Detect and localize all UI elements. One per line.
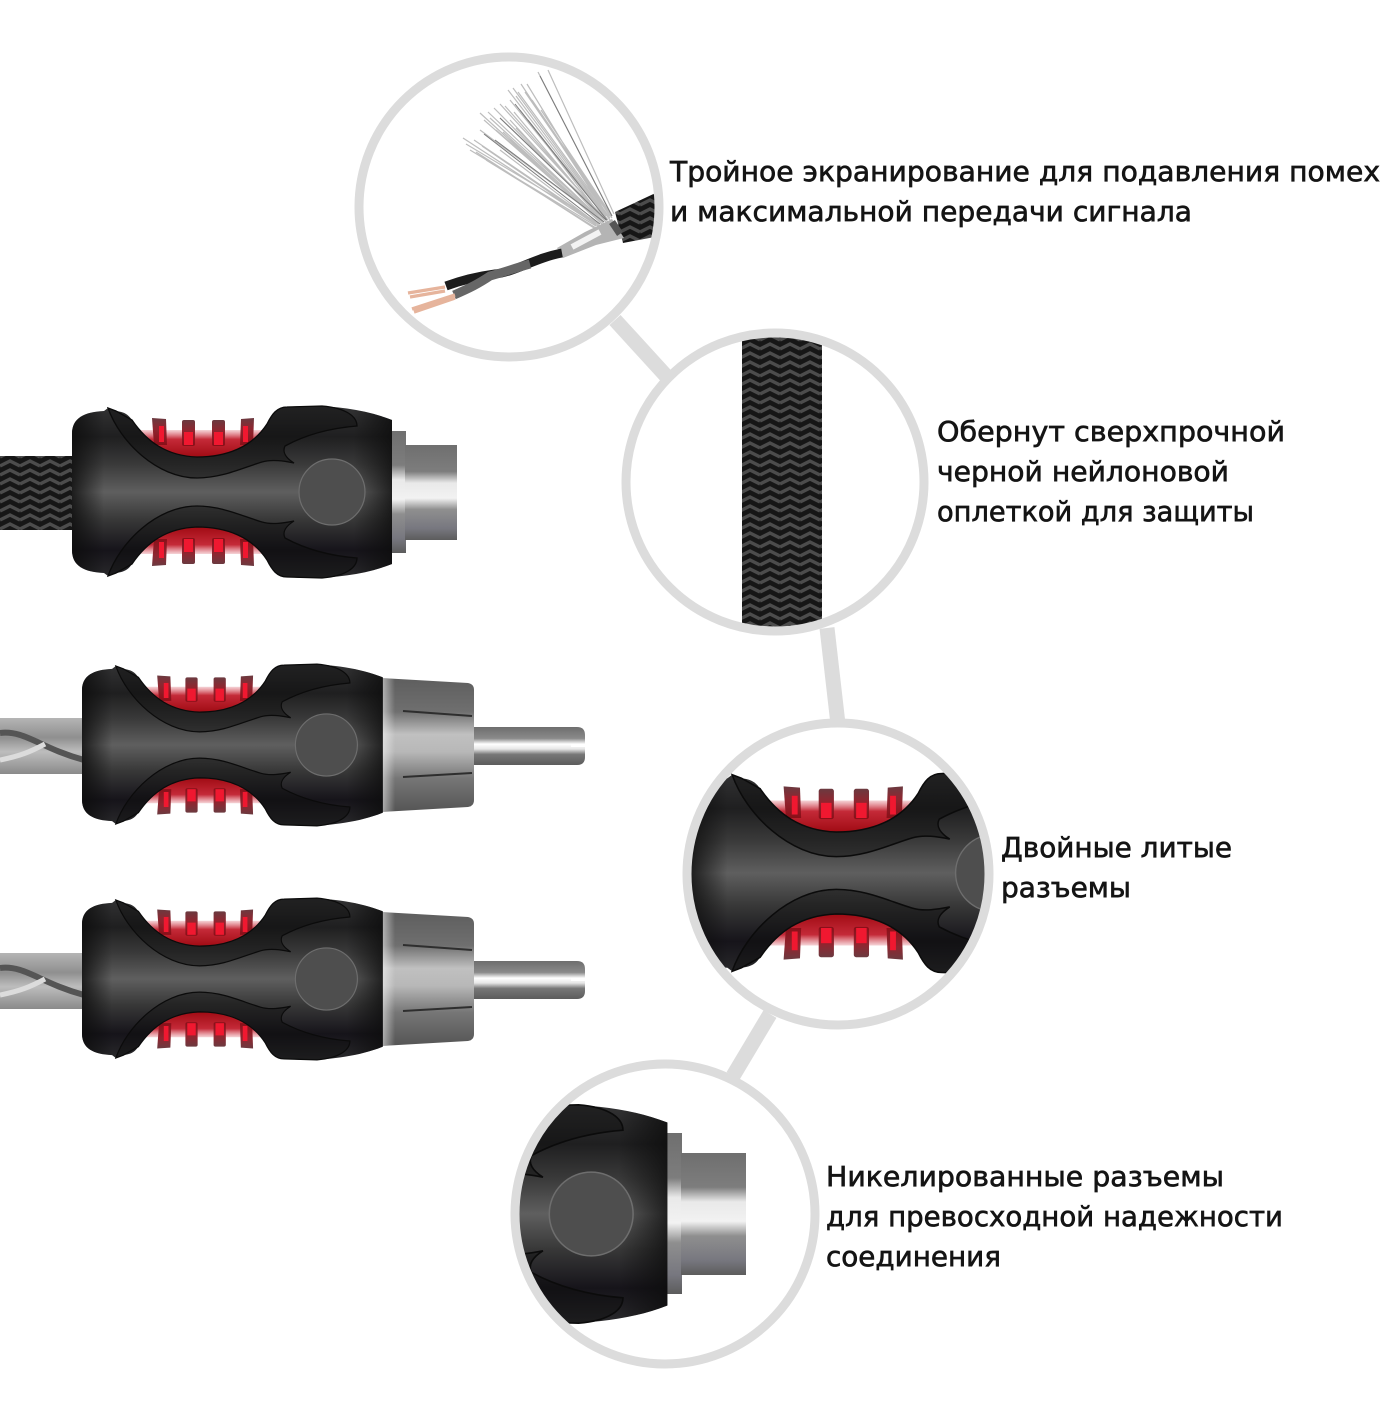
text: triple shielding: и максимальной передачи сигнала: [670, 195, 1192, 228]
ring: [359, 57, 659, 357]
metal pin: [472, 727, 586, 765]
moulded body: [72, 406, 392, 578]
text: nickel plated: Никелированные разъемы: [826, 1160, 1224, 1193]
metal collar: [380, 912, 474, 1046]
text: nylon braid: [937, 415, 1285, 528]
panel: double moulded callout: [682, 718, 994, 1030]
panel: nickel plated callout: [510, 1060, 820, 1368]
metal pin: [472, 961, 586, 999]
panel: nylon braid callout: [626, 330, 924, 634]
silver shield strands: [463, 70, 614, 228]
stripped cable illustration: [408, 70, 660, 312]
cable: braided female input: [0, 456, 74, 530]
text: nickel plated: соединения: [826, 1240, 1001, 1273]
connector: female RCA: [72, 406, 457, 578]
text: nickel plated: для превосходной надежности: [826, 1200, 1283, 1233]
enlarged socket: [520, 1104, 746, 1324]
text: triple shielding: [669, 155, 1380, 228]
ring: [687, 723, 989, 1025]
connector: male RCA 1: [82, 664, 586, 826]
text: double moulded: разъемы: [1001, 871, 1131, 904]
panel: cable layers callout: [359, 57, 660, 357]
text: triple shielding: Тройное экранирование для подавления помех: [669, 155, 1380, 188]
braided jacket: [615, 194, 654, 243]
moulded body: [82, 898, 383, 1060]
metal ring: [390, 431, 406, 553]
braided cable: [742, 330, 822, 634]
connector lines between callouts: [615, 320, 838, 1076]
cable: twisted male 2: [0, 953, 84, 1009]
foil shield: [557, 219, 624, 258]
ring: [626, 333, 924, 631]
metal collar: [380, 678, 474, 812]
ring: [515, 1064, 815, 1364]
twisted inner wires: [446, 253, 562, 286]
text: nylon braid: черной нейлоновой: [937, 455, 1229, 488]
text: nylon braid: Обернут сверхпрочной: [937, 415, 1285, 448]
enlarged connector body: [692, 772, 984, 974]
text: double moulded: Двойные литые: [1001, 831, 1232, 864]
copper conductors: [408, 287, 455, 312]
metal socket: [405, 445, 457, 540]
text: double moulded: [1001, 831, 1232, 904]
cable: twisted male 1: [0, 718, 84, 774]
connector: male RCA 2: [82, 898, 586, 1060]
text: nylon braid: оплеткой для защиты: [937, 495, 1254, 528]
text: nickel plated: [826, 1160, 1283, 1273]
moulded body: [82, 664, 383, 826]
